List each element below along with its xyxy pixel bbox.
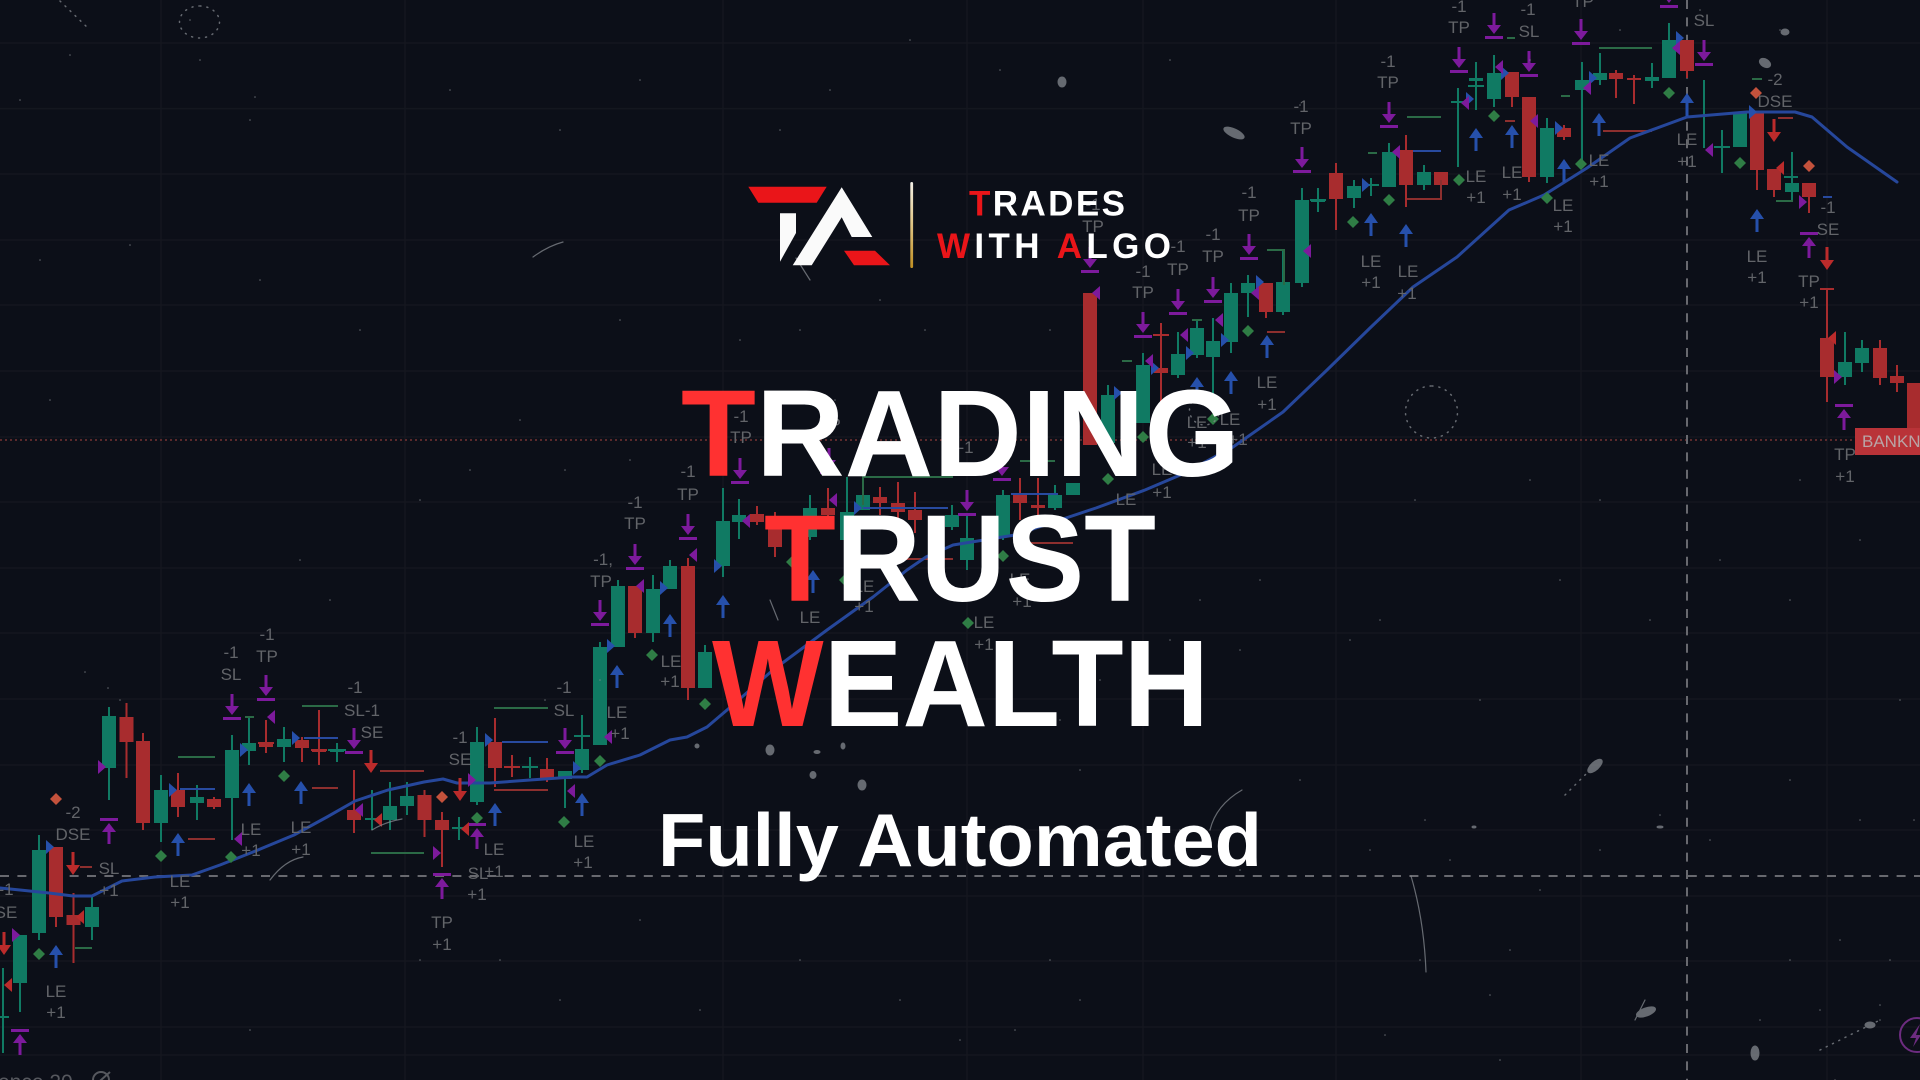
chart signal labels: TP xyxy=(256,647,278,666)
chart signal labels: LE xyxy=(484,840,504,859)
chart signal labels: SE xyxy=(449,750,471,769)
moving average line xyxy=(0,112,1897,896)
chart signal labels: +1 xyxy=(170,893,190,912)
chart signal labels: -1 xyxy=(1293,97,1309,116)
chart signal labels: TP xyxy=(624,514,646,533)
brand logo xyxy=(748,182,1171,268)
chart signal labels: +1 xyxy=(432,935,452,954)
chart signal labels: +1 xyxy=(1589,172,1609,191)
chart signal labels: -1 xyxy=(958,438,974,457)
chart signal labels: TP xyxy=(1834,445,1856,464)
chart signal labels: LE xyxy=(607,703,627,722)
chart signal labels: LE xyxy=(1677,130,1697,149)
main headline: WEALTH xyxy=(712,616,1209,753)
chart signal labels: -1 xyxy=(627,493,643,512)
chart signal labels: TP xyxy=(1238,206,1260,225)
chart signal labels: -1 xyxy=(1520,0,1536,19)
chart signal labels: LE xyxy=(1553,196,1573,215)
chart signal labels: LE xyxy=(46,982,66,1001)
chart signal labels: -1 xyxy=(1085,195,1101,214)
chart signal labels: TP xyxy=(1132,283,1154,302)
chart signal labels: LE xyxy=(1398,262,1418,281)
chart signal labels: +1 xyxy=(1799,293,1819,312)
main headline: TRUST xyxy=(764,491,1156,628)
chart signal labels: +1 xyxy=(484,862,504,881)
chart signal labels: SL xyxy=(99,859,119,878)
chart signal labels: -1 xyxy=(452,728,468,747)
chart signal labels: LE xyxy=(1589,151,1609,170)
red short-entry arrows xyxy=(0,119,1834,955)
chart signal labels: -1 xyxy=(1380,52,1396,71)
chart signal labels: +1 xyxy=(46,1003,66,1022)
chart signal labels: SL-1 xyxy=(344,701,380,720)
brand name xyxy=(937,184,1171,266)
chart signal labels: TP xyxy=(1290,119,1312,138)
chart signal labels: LE xyxy=(1116,490,1136,509)
chart signal labels: +1 xyxy=(1466,188,1486,207)
chart signal labels: LE xyxy=(1747,247,1767,266)
chart signal labels: TP xyxy=(1082,217,1104,236)
chart signal labels: SL xyxy=(468,864,488,883)
chart signal labels: +1 xyxy=(467,885,487,904)
chart signal labels: LE xyxy=(800,608,820,627)
chart signal labels: -1 xyxy=(1820,198,1836,217)
chart signal labels: LE xyxy=(1502,163,1522,182)
chart signal labels: TP xyxy=(677,485,699,504)
chart signal labels: LE xyxy=(1220,410,1240,429)
chart signal labels: +1 xyxy=(854,597,874,616)
chart signal labels: SE xyxy=(361,723,383,742)
chart signal labels: TP xyxy=(1202,247,1224,266)
chart signal labels: TP xyxy=(1167,260,1189,279)
chart signal labels: +1 xyxy=(660,672,680,691)
chart signal labels: +1 xyxy=(573,853,593,872)
chart signal labels: -1 xyxy=(1170,237,1186,256)
chart signal labels: -1 xyxy=(347,678,363,697)
chart signal labels: -1 xyxy=(556,678,572,697)
chart signal labels: +1 xyxy=(610,724,630,743)
chart signal labels: -2 xyxy=(1767,70,1783,89)
chart signal labels: SL xyxy=(221,665,241,684)
chart signal labels: TP xyxy=(1798,272,1820,291)
chart signal labels: -1 xyxy=(223,643,239,662)
BANKNIFTY price tag: BANKN xyxy=(1862,432,1920,451)
chart signal labels: SL xyxy=(1694,11,1714,30)
chart signal labels: +1 xyxy=(974,635,994,654)
chart signal labels: +1 xyxy=(1677,152,1697,171)
chart signal labels: +1 xyxy=(1397,284,1417,303)
bottom-right lightning badge xyxy=(1900,1018,1920,1052)
chart signal labels: +1 xyxy=(1257,395,1277,414)
chart signal labels: SL xyxy=(554,701,574,720)
chart signal labels: SL xyxy=(1519,22,1539,41)
chart signal labels: DSE xyxy=(56,825,90,844)
chart signal labels: LE xyxy=(1010,570,1030,589)
chart signal labels: +1 xyxy=(99,881,119,900)
blue long-entry arrows xyxy=(49,93,1764,968)
chart signal labels: -1 xyxy=(1241,183,1257,202)
bottom-left status text and eye icon xyxy=(0,1071,110,1080)
logo mark TA xyxy=(748,187,890,265)
chart signal labels: -2 xyxy=(65,803,81,822)
chart signal labels: -1 xyxy=(733,407,749,426)
chart signal labels: +1 xyxy=(1747,268,1767,287)
price level dotted line xyxy=(0,439,1920,441)
chart signal labels: +1 xyxy=(1152,483,1172,502)
chart signal labels: LE xyxy=(1257,373,1277,392)
chart signal labels: -1 xyxy=(1205,225,1221,244)
signal diamonds xyxy=(33,87,1815,960)
chart signal labels: -1 xyxy=(259,625,275,644)
chart signal labels: LE xyxy=(291,818,311,837)
chart signal labels: DSE xyxy=(1758,92,1792,111)
chart signal labels: LE xyxy=(170,872,190,891)
chart signal labels: -1 xyxy=(1135,262,1151,281)
order level lines xyxy=(75,38,1832,948)
brand name: WITH ALGO xyxy=(937,227,1171,266)
chart signal labels: +1 xyxy=(1553,217,1573,236)
chart signal labels: +1 xyxy=(1835,467,1855,486)
chart signal labels: TP xyxy=(1448,18,1470,37)
main headline xyxy=(681,366,1240,753)
chart signal labels: LE xyxy=(574,832,594,851)
chart signal labels: LE xyxy=(1361,252,1381,271)
chart signal labels: LE xyxy=(661,652,681,671)
chart signal labels: +1 xyxy=(1187,433,1207,452)
chart signal labels: TP xyxy=(431,913,453,932)
chart signal labels: LE xyxy=(854,577,874,596)
gold divider xyxy=(910,182,913,268)
chart signal labels: SE xyxy=(1817,220,1839,239)
chart signal labels: TP xyxy=(590,572,612,591)
brand name: TRADES xyxy=(969,184,1125,224)
chart signal labels: +1 xyxy=(1502,185,1522,204)
chart signal labels: +1 xyxy=(1228,430,1248,449)
subtitle: Fully Automated xyxy=(658,798,1262,882)
chart signal labels: -1, xyxy=(593,550,613,569)
chart signal labels: LE xyxy=(1152,460,1172,479)
chart signal labels: +1 xyxy=(1012,592,1032,611)
BANKNIFTY price tag xyxy=(1855,428,1920,455)
chart signal labels: -1 xyxy=(680,462,696,481)
main headline: TRADING xyxy=(681,366,1240,503)
chart signal labels: +1 xyxy=(291,840,311,859)
chart signal labels: LE xyxy=(241,820,261,839)
chart signal labels: LE xyxy=(1466,167,1486,186)
chart signal labels: TP xyxy=(730,428,752,447)
chart signal labels: TP xyxy=(1377,73,1399,92)
chart signal labels: +1 xyxy=(1361,273,1381,292)
chart signal labels: TP xyxy=(819,415,841,434)
chart signal labels: LE xyxy=(974,613,994,632)
chart signal labels: LE xyxy=(1187,413,1207,432)
chart signal labels: +1 xyxy=(241,841,261,860)
